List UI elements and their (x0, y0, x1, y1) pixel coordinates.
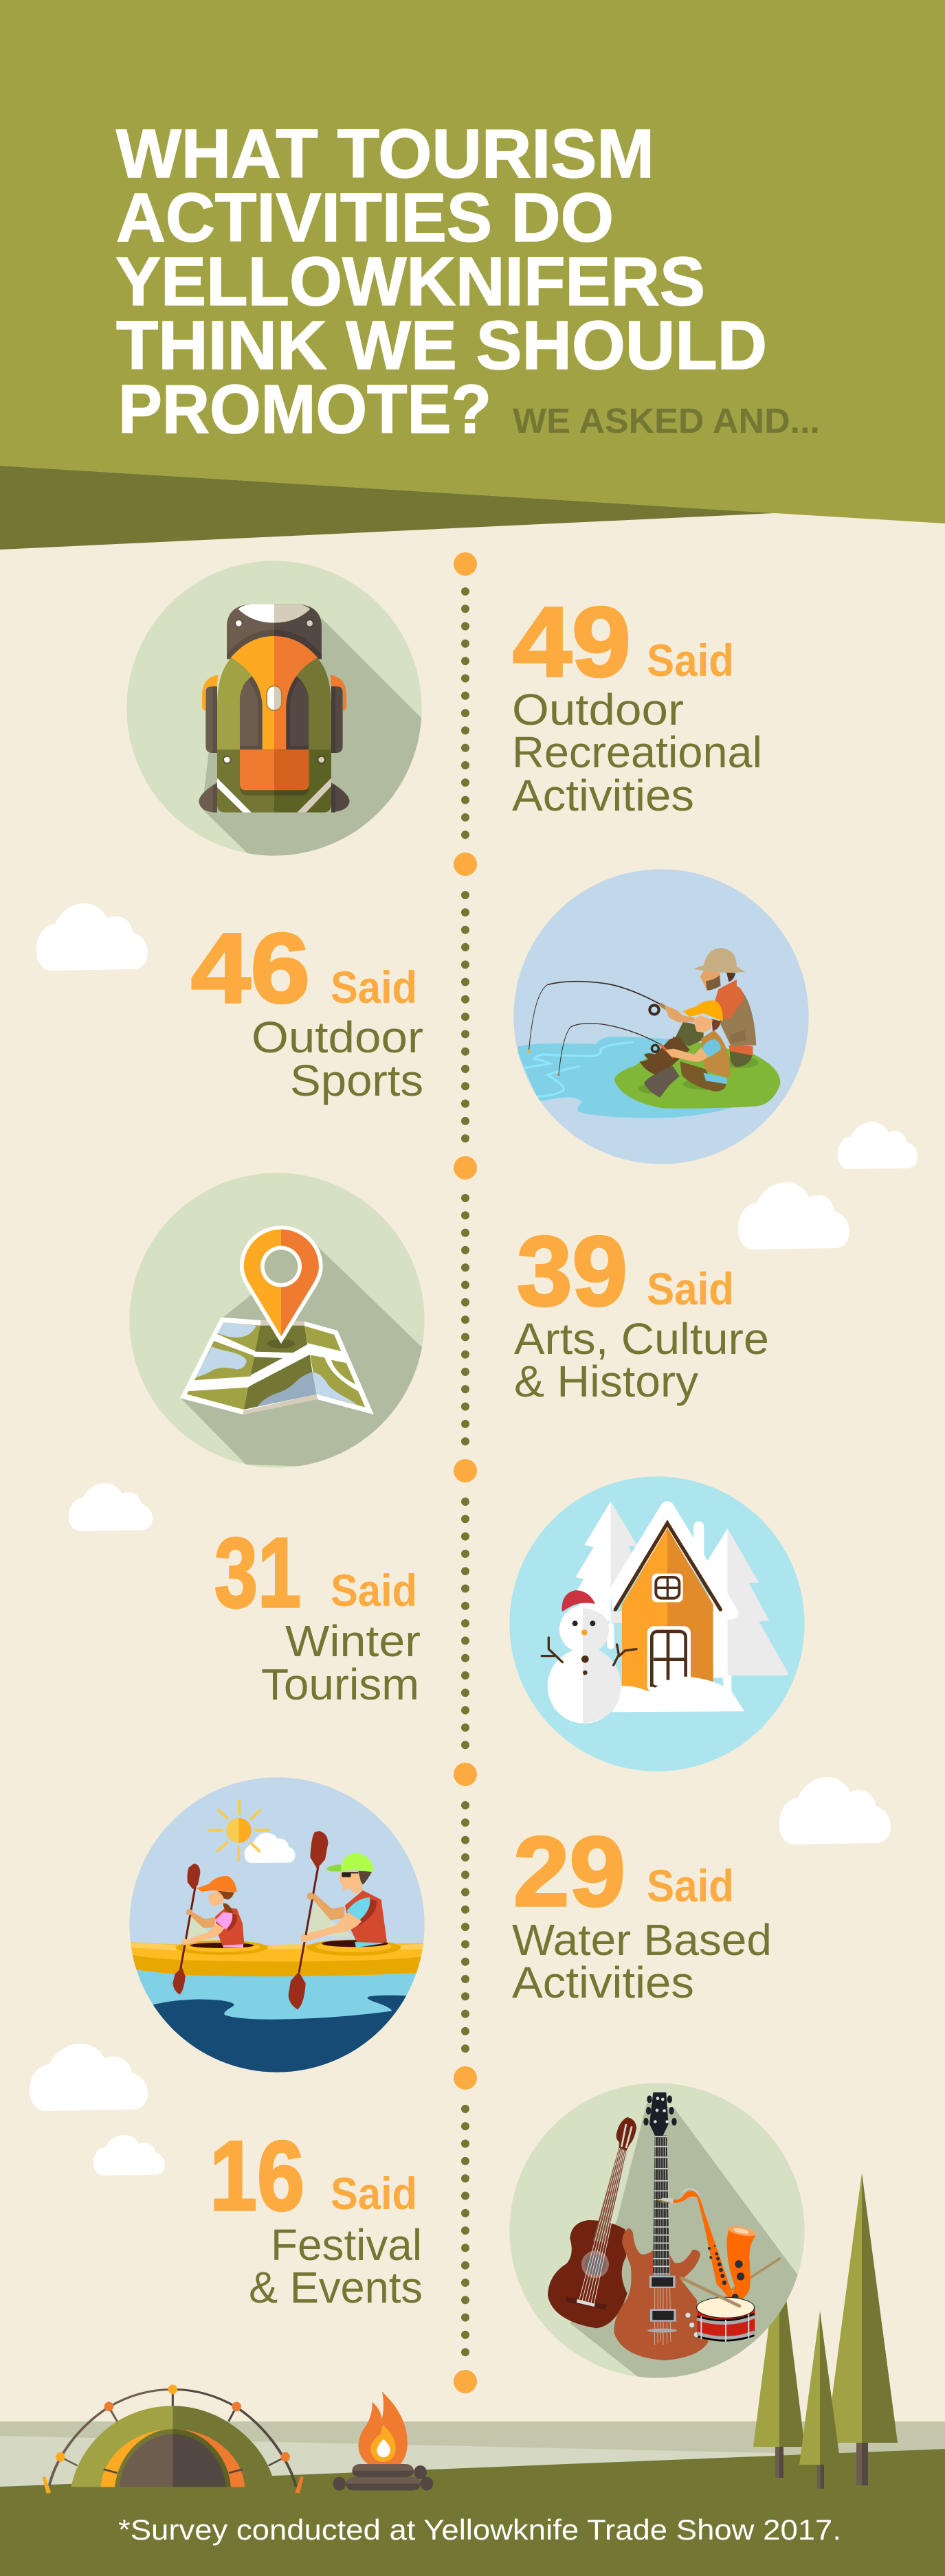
stat: 29 said: 29 (513, 1816, 625, 1927)
dotted timeline (454, 552, 477, 2393)
stat: 49 said: Outdoor (512, 685, 684, 734)
subtitle: we asked and: WE ASKED AND... (513, 401, 820, 440)
stat: 46 said: Outdoor (252, 1013, 423, 1062)
stat: 29 said: Water Based (512, 1915, 772, 1965)
stat: 31 said: 31 (214, 1517, 301, 1628)
title: PROMOTE? (118, 371, 491, 448)
footnote: *Survey conducted at Yellowknife Trade Show 2017. (118, 2513, 841, 2546)
stat: 31 said: Winter (285, 1616, 421, 1666)
icon: musical instruments (509, 2083, 807, 2380)
ground scenery (0, 2421, 945, 2576)
stat: 29 said: Activities (512, 1958, 694, 2007)
icon: fishing (513, 869, 809, 1164)
stat: 49 said: Recreational (512, 727, 762, 777)
icon: backpack (126, 561, 424, 858)
icon: kayak (129, 1777, 427, 2075)
stat: 16 said: 16 (210, 2121, 304, 2231)
stat: 39 said: Arts, Culture (514, 1314, 769, 1364)
stat: 16 said: Festival (271, 2220, 422, 2270)
stat: 46 said: 46 (191, 913, 310, 1024)
title: WHAT TOURISM (116, 115, 654, 192)
stat: 16 said (210, 2121, 423, 2312)
campfire (333, 2392, 433, 2491)
stat: 31 said: Tourism (261, 1660, 419, 1709)
title (115, 115, 767, 448)
saxophone (656, 2189, 757, 2301)
map pin (240, 1225, 323, 1344)
stat: 39 said: & History (514, 1357, 698, 1406)
stat: 46 said: Said (331, 962, 417, 1013)
acoustic guitar (548, 2117, 636, 2328)
drum (697, 2297, 755, 2342)
clouds (30, 903, 918, 2176)
stat: 46 said: Sports (290, 1056, 423, 1105)
stat: 49 said: 49 (513, 587, 631, 697)
stat: 31 said: Said (331, 1565, 417, 1616)
tree tall (826, 2173, 898, 2485)
icon: map and pin (129, 1173, 427, 1470)
stat: 49 said: Said (647, 635, 734, 686)
stat: 16 said: & Events (249, 2263, 423, 2312)
title: THINK WE SHOULD (116, 307, 767, 384)
icon: winter house (509, 1476, 805, 1772)
electric guitar (614, 2092, 709, 2360)
tree left (753, 2244, 805, 2478)
stat: 49 said: Activities (512, 771, 694, 820)
tree small (799, 2311, 841, 2489)
title: YELLOWKNIFERS (115, 243, 705, 320)
stat: 46 said (191, 913, 423, 1105)
small cloud (245, 1833, 296, 1863)
stat: 29 said (512, 1816, 772, 2007)
title: ACTIVITIES DO (116, 179, 614, 256)
stat: 16 said: Said (331, 2168, 417, 2219)
stat: 39 said (514, 1216, 769, 1406)
tent (43, 2384, 304, 2494)
sun (210, 1801, 268, 1860)
stat: 29 said: Said (647, 1860, 734, 1911)
stat: 39 said: Said (647, 1263, 734, 1314)
snowman (542, 1590, 636, 1724)
stat: 31 said (214, 1517, 421, 1709)
stat: 49 said (512, 587, 762, 820)
stat: 39 said: 39 (517, 1216, 627, 1326)
header panel (0, 0, 945, 550)
